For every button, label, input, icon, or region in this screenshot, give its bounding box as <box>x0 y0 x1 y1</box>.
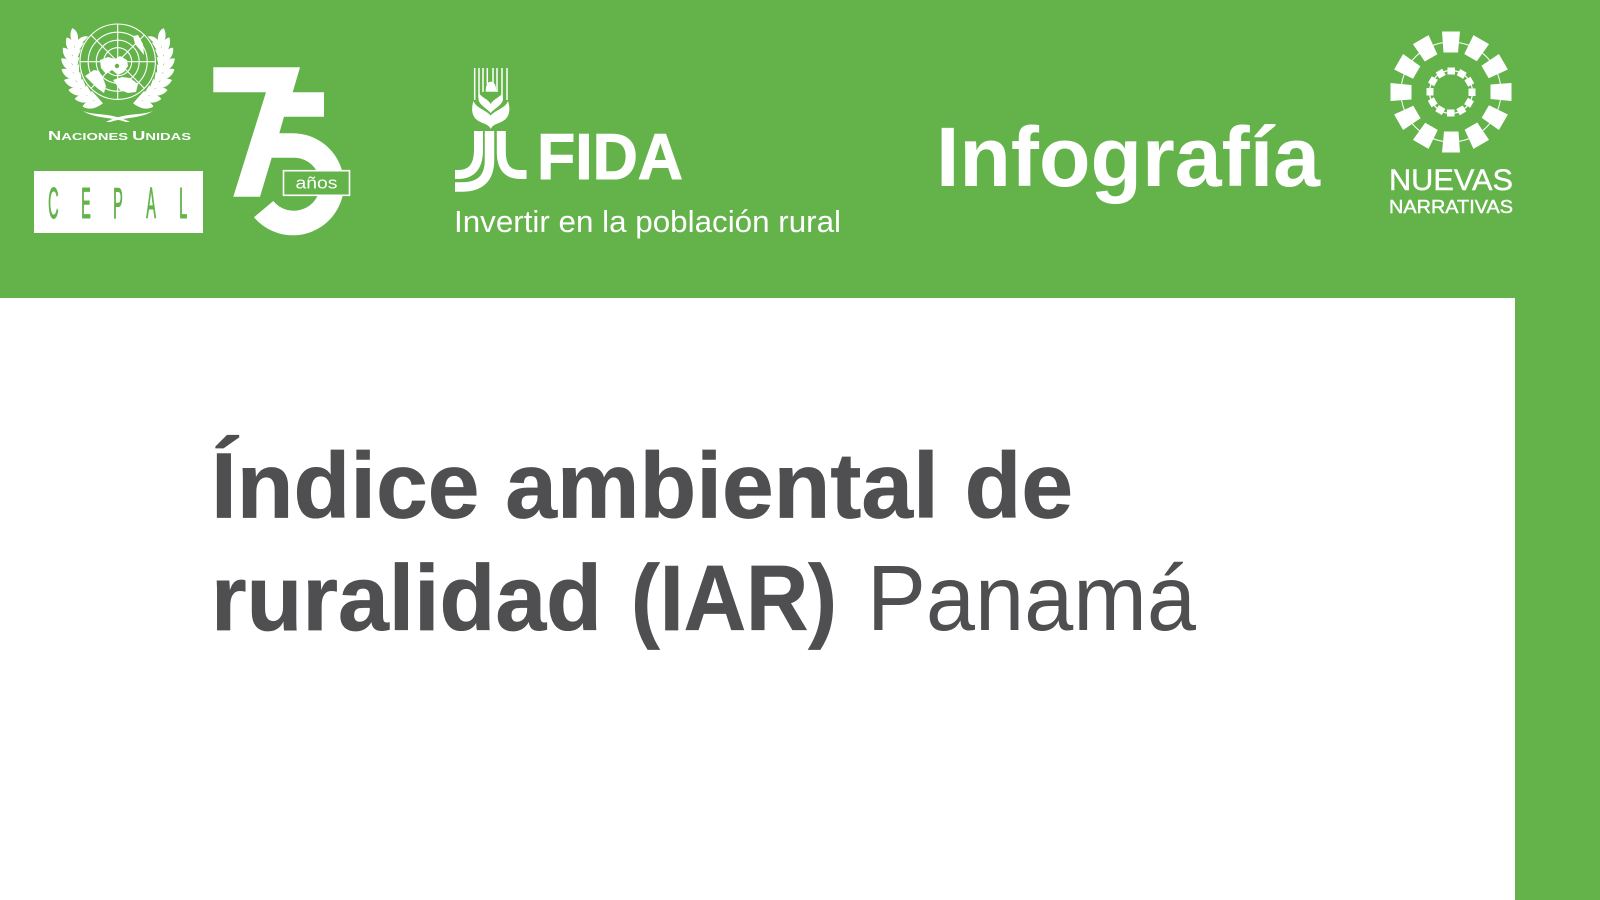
title: ruralidad: ruralidad <box>211 546 602 650</box>
text: Nuevas: NUEVAS <box>1389 164 1513 197</box>
logo: FIDA wheat and JJL mark <box>455 68 526 187</box>
label: años <box>284 171 350 195</box>
text: FIDA: FIDA <box>537 120 683 193</box>
text: Naciones Unidas: N ACIONES U NIDAS <box>48 129 191 143</box>
label: años: años <box>296 173 338 192</box>
text: Invertir en la población rural: Invertir en la población rural <box>454 204 841 239</box>
title line 1: Índice ambiental de <box>211 434 1073 538</box>
title line 2 <box>211 546 1196 650</box>
title: (IAR): (IAR) <box>631 546 837 650</box>
logo: CEPAL box <box>34 171 203 233</box>
text: Narrativas: NARRATIVAS <box>1389 197 1513 217</box>
title: Panamá: Panamá <box>867 546 1196 650</box>
heading: Infografía: Infografía <box>936 110 1321 204</box>
logo: CEPAL box: CEPAL <box>48 178 187 227</box>
logo: 75 años <box>213 67 350 235</box>
icon: United Nations emblem <box>61 23 175 122</box>
logo: Nuevas Narrativas wheel <box>1390 32 1512 152</box>
panel: white content area <box>0 298 1515 900</box>
